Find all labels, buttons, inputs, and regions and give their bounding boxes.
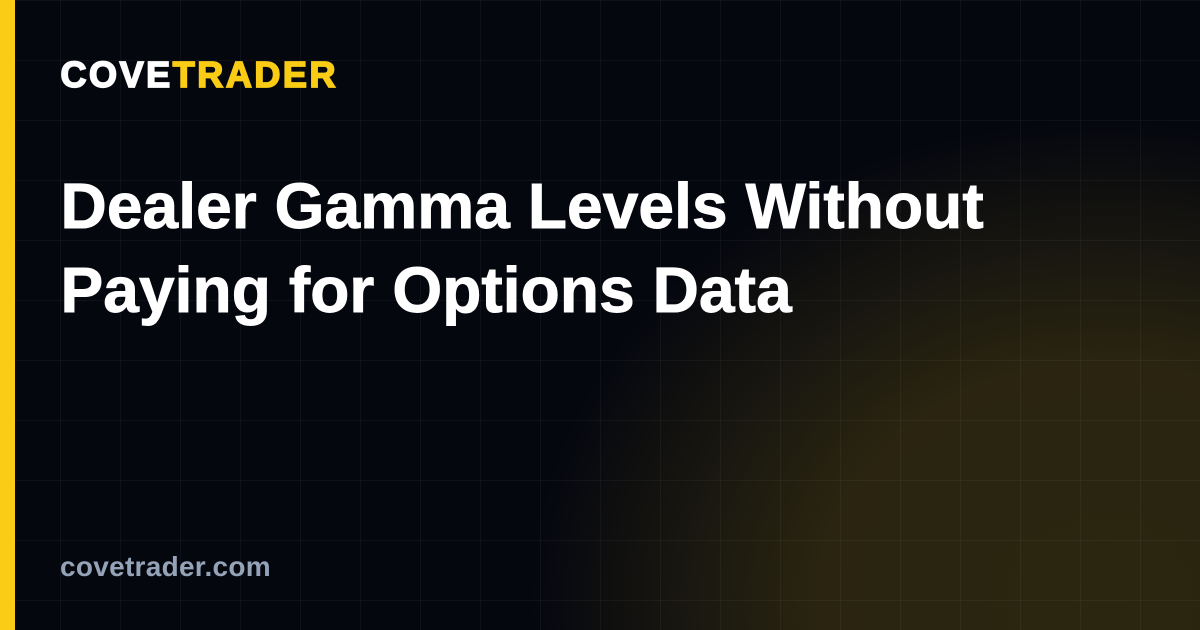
title <box>60 170 984 326</box>
title: Dealer Gamma Levels Without <box>60 170 984 242</box>
title: Paying for Options Data <box>60 254 792 326</box>
logo: COVETRADER <box>60 54 338 95</box>
domain: covetrader.com <box>60 551 271 582</box>
accent bar <box>0 0 15 630</box>
